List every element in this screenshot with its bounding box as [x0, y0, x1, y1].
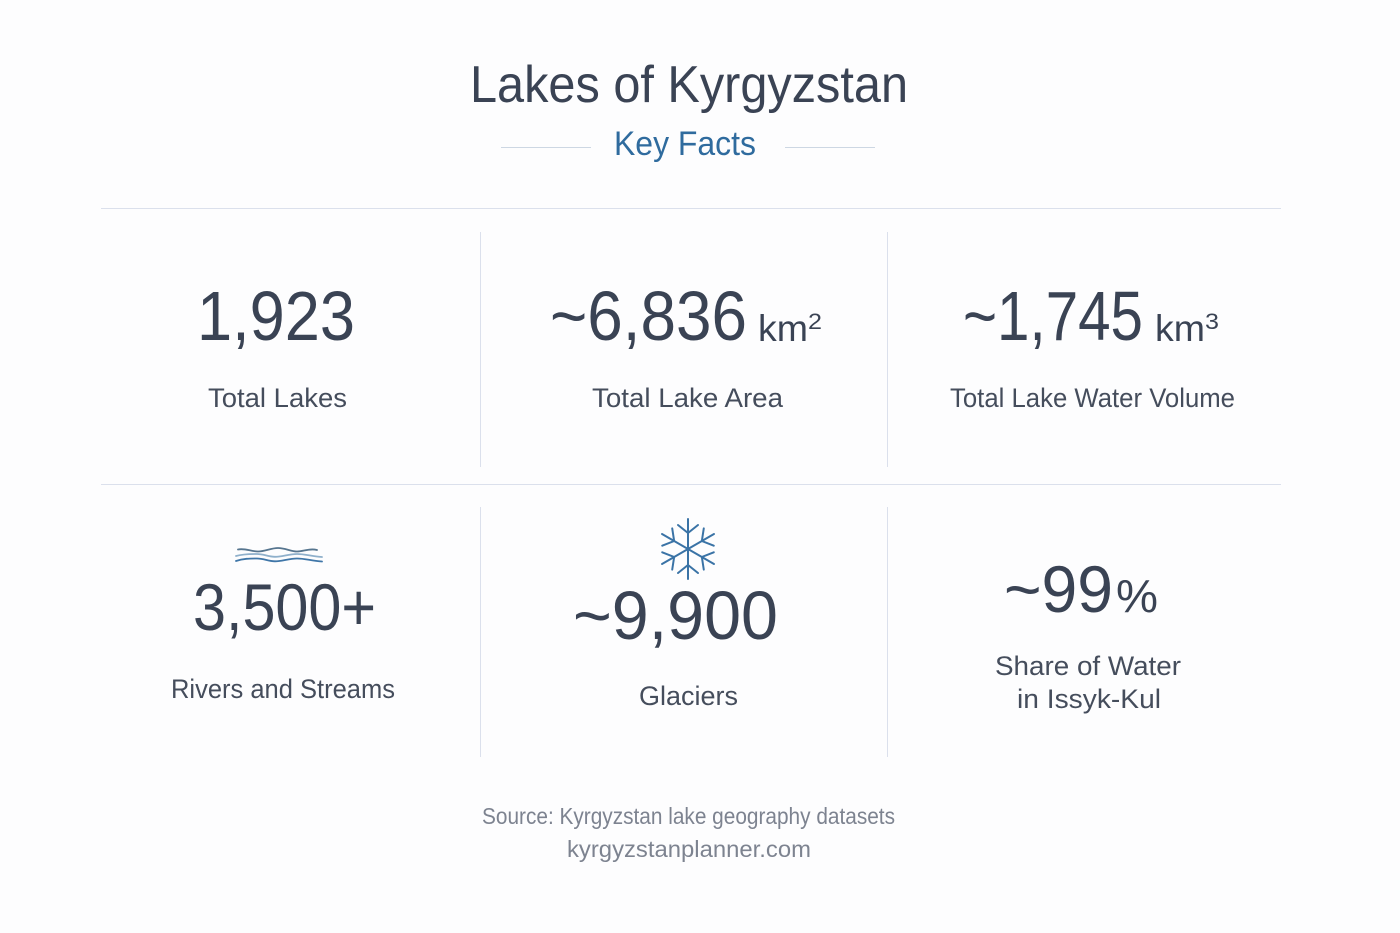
stat: total lake area [550, 277, 822, 413]
stat: rivers and streams [171, 548, 395, 704]
stat: rivers and streams: Rivers and Streams [171, 674, 395, 704]
stat: total lake water volume: ~1,745 [963, 277, 1143, 355]
stat: total lakes: Total Lakes [208, 383, 347, 413]
stat: share of water in Issyk-Kul: ~99 [1004, 552, 1113, 626]
icon: snowflake [657, 519, 719, 579]
stat: total lake area: km [758, 308, 808, 349]
stat: total lakes: 1,923 [197, 277, 355, 355]
stat: total lake water volume [950, 277, 1235, 413]
stat: total lakes [197, 277, 355, 413]
stat: glaciers: ~9,900 [573, 577, 778, 654]
subtitle: Key Facts [614, 125, 756, 163]
title: Lakes of Kyrgyzstan [470, 56, 908, 114]
source note: Source: Kyrgyzstan lake geography datasets [482, 803, 895, 829]
stat: total lake area: Total Lake Area [592, 383, 784, 413]
stat: share of water in Issyk-Kul: in Issyk-Kul [1017, 684, 1161, 714]
stat: share of water in Issyk-Kul [995, 552, 1181, 714]
source note: kyrgyzstanplanner.com [567, 836, 811, 862]
icon: waves [236, 548, 322, 562]
stat: total lake area: 2 [808, 309, 822, 334]
stat: total lake area: ~6,836 [550, 277, 747, 355]
stat: total lake water volume: Total Lake Water Volume [950, 383, 1235, 413]
stat: share of water in Issyk-Kul: % [1116, 570, 1158, 622]
stat: rivers and streams: 3,500+ [193, 570, 376, 644]
stat: total lake water volume: 3 [1205, 309, 1219, 334]
stat: share of water in Issyk-Kul: Share of Water [995, 651, 1181, 681]
stat: glaciers [573, 519, 778, 711]
stat: total lake water volume: km [1155, 308, 1205, 349]
stat: glaciers: Glaciers [639, 681, 738, 711]
source note [482, 803, 895, 862]
